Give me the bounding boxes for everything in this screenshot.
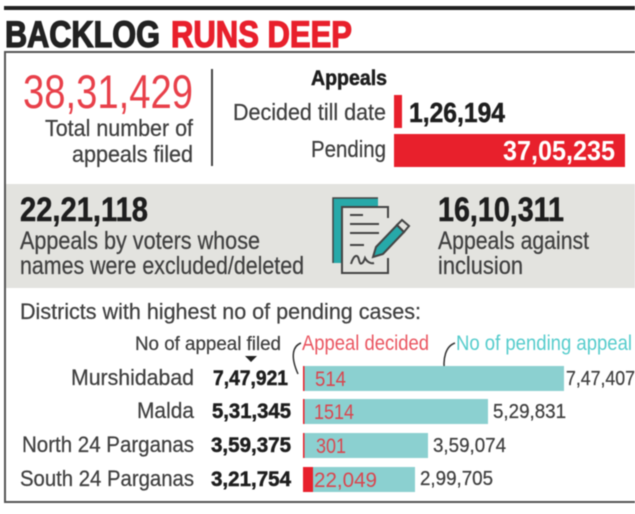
panel: appeal categories: Appeals against bbox=[438, 227, 589, 255]
icon: document and pen bbox=[333, 198, 409, 273]
chart: appeals decided vs pending: Pending bbox=[311, 136, 386, 162]
row: South 24 Parganas: South 24 Parganas bbox=[20, 466, 194, 491]
title bbox=[5, 14, 352, 55]
chart: appeals decided vs pending bbox=[233, 67, 625, 167]
row: South 24 Parganas: 3,21,754 bbox=[211, 468, 291, 491]
panel: appeal categories: inclusion bbox=[438, 252, 523, 280]
legend: appeal decided bbox=[293, 332, 429, 374]
row: North 24 Parganas bbox=[22, 432, 506, 458]
row: Murshidabad: Murshidabad bbox=[71, 365, 194, 390]
title: RUNS DEEP bbox=[171, 14, 352, 55]
row: North 24 Parganas: 3,59,375 bbox=[211, 434, 291, 457]
chart: appeals decided vs pending: Appeals bbox=[311, 67, 387, 90]
row: Murshidabad: 7,47,921 bbox=[213, 367, 288, 390]
panel: appeal categories: names were excluded/deleted bbox=[20, 252, 304, 280]
row: Murshidabad bbox=[71, 365, 635, 391]
legend: pending appeal bbox=[444, 332, 632, 375]
row: North 24 Parganas: North 24 Parganas bbox=[22, 432, 194, 457]
chart: appeals decided vs pending: 1,26,194 bbox=[409, 97, 505, 128]
row: South 24 Parganas bbox=[20, 466, 493, 492]
row: Malda: 5,31,345 bbox=[212, 400, 291, 423]
row: South 24 Parganas: 22,049 bbox=[314, 469, 377, 492]
title: BACKLOG bbox=[5, 14, 160, 55]
panel: total appeals bbox=[23, 65, 194, 167]
row: Malda: 5,29,831 bbox=[493, 401, 566, 423]
chart: appeals decided vs pending: 37,05,235 bbox=[503, 135, 615, 166]
panel: appeal categories: 16,10,311 bbox=[438, 191, 564, 229]
panel: total appeals: Total number of bbox=[45, 115, 194, 141]
heading: districts: Districts with highest no of pending cases: bbox=[20, 299, 421, 324]
row: North 24 Parganas: 301 bbox=[316, 435, 346, 458]
panel: appeal categories: 22,21,118 bbox=[20, 191, 148, 229]
row: Malda bbox=[137, 398, 566, 424]
chart: appeals decided vs pending: Decided till date bbox=[233, 99, 386, 125]
row: Malda: Malda bbox=[137, 398, 195, 423]
panel: appeal categories: Appeals by voters whose bbox=[20, 227, 260, 255]
legend: appeal decided: Appeal decided bbox=[302, 332, 429, 355]
panel: total appeals: 38,31,429 bbox=[23, 65, 193, 118]
panel: total appeals: appeals filed bbox=[72, 141, 193, 167]
legend: appeals filed: No of appeal filed bbox=[135, 334, 281, 355]
row: South 24 Parganas: 2,99,705 bbox=[420, 468, 493, 490]
row: North 24 Parganas: 3,59,074 bbox=[433, 435, 506, 457]
row: Murshidabad: 514 bbox=[315, 368, 346, 391]
panel: appeal categories bbox=[6, 184, 635, 288]
row: Malda: 1514 bbox=[314, 401, 354, 424]
